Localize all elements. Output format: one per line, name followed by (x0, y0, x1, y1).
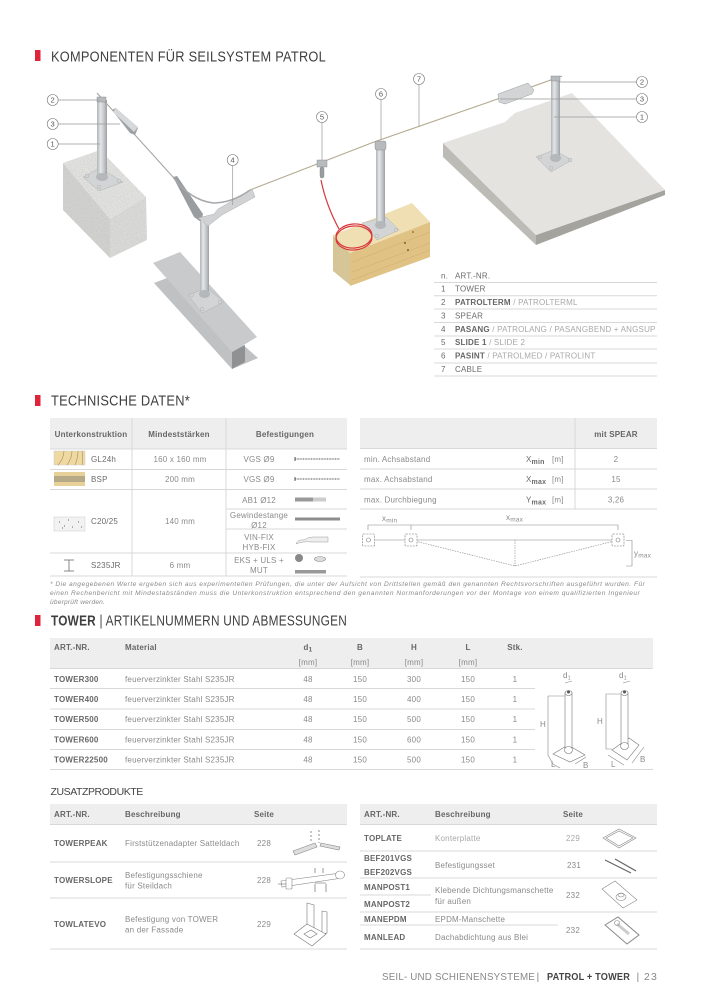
row TOWER400: 400 (407, 695, 421, 704)
callout numbers: 3 (640, 95, 644, 104)
table: accessories right: Seite (563, 810, 583, 819)
row TOWER500: 48 (303, 715, 313, 724)
row TOWERSLOPE: Befestigungsschiene (125, 871, 203, 880)
callout numbers: 1 (640, 113, 644, 122)
row TOWER300: 150 (461, 675, 475, 684)
legend table: 4 (441, 325, 446, 334)
diagram: spacing and deflection: y (634, 549, 638, 558)
table: substructures: EKS + ULS + (234, 556, 284, 565)
row TOWER300: 48 (303, 675, 313, 684)
footnote: überprüft werden. (50, 599, 105, 606)
row TOWER600: TOWER600 (54, 736, 99, 744)
legend table: 6 (441, 352, 446, 360)
row TOWERPEAK (54, 839, 271, 848)
heading: Technische Daten: TECHNISCHE DATEN* (51, 392, 190, 410)
icon: towerpeak (293, 830, 340, 855)
row TOWER500: 500 (407, 715, 421, 724)
icon: GL24h (54, 451, 85, 465)
table: accessories left (50, 804, 347, 949)
table: tower dimensions: [mm] (459, 658, 477, 667)
row MANPOST: Klebende Dichtungsmanschette (435, 886, 554, 895)
table: substructures: 200 mm (165, 475, 195, 484)
table: tower dimensions: 1 (309, 646, 313, 654)
table: spear data: max (532, 500, 546, 506)
row TOWERSLOPE: 228 (257, 876, 271, 885)
row TOWER500: feuerverzinkter Stahl S235JR (125, 715, 235, 724)
icon: screws (605, 859, 636, 873)
icon: towerslope (278, 868, 344, 892)
table: accessories right (360, 804, 657, 949)
table: spear data: 3,26 (608, 496, 625, 504)
table: tower dimensions: ART.-NR. (54, 643, 90, 652)
row TOWER600: 48 (303, 736, 313, 744)
table: accessories left: Beschreibung (125, 810, 181, 819)
table: tower dimensions: Stk. (507, 643, 523, 652)
table: substructures: GL24h (91, 455, 116, 464)
dimension drawing 2: H (597, 717, 603, 726)
dimension drawing 1: B (583, 761, 589, 770)
table: substructures: C20/25 (91, 517, 118, 526)
table: tower dimensions: [mm] (405, 658, 423, 667)
icon: BSP (54, 472, 85, 486)
table: accessories left: ART.-NR. (54, 810, 90, 819)
row TOWER400: TOWER400 (54, 695, 99, 704)
angle bracket (173, 176, 255, 226)
footer: 23 (644, 971, 657, 983)
table: tower dimensions (50, 638, 653, 770)
table: substructures: 140 mm (165, 517, 195, 526)
legend table: SPEAR (455, 312, 483, 320)
row MANEPDM and MANLEAD: 232 (566, 926, 580, 935)
icon: manpost (602, 881, 637, 908)
towers (96, 80, 561, 298)
table: spear data: min (532, 459, 545, 466)
row TOWER600: 600 (407, 736, 421, 744)
table: spear data: min. Achsabstand (364, 455, 430, 464)
sliders and heads (97, 76, 560, 178)
footer: PATROL + TOWER (547, 971, 630, 983)
row TOWLATEVO: an der Fassade (125, 926, 184, 934)
diagram: spacing and deflection (362, 513, 652, 566)
legend table: n. (441, 272, 448, 280)
heading: Zusatzprodukte: ZUSATZPRODUKTE (50, 786, 144, 798)
row BEF: 231 (567, 861, 581, 870)
legend table: PATROLTERM / PATROLTERML (455, 298, 578, 307)
row MANPOST: MANPOST1 (364, 883, 410, 892)
table: spear data: [m] (552, 475, 564, 484)
row TOWER22500: 1 (513, 756, 518, 764)
table: substructures: S235JR (91, 561, 121, 570)
table: spear data: mit SPEAR (594, 430, 638, 439)
icon: toplate (603, 829, 636, 848)
table: spear data: 15 (611, 475, 621, 484)
callout numbers: 3 (51, 120, 55, 129)
table: substructures: Mindeststärken (148, 430, 210, 439)
row TOWER22500: 500 (407, 756, 421, 764)
legend table (434, 272, 657, 376)
row TOWLATEVO: 229 (257, 920, 271, 929)
row TOWLATEVO: Befestigung von TOWER (125, 915, 218, 924)
legend table: SLIDE 1 / SLIDE 2 (455, 338, 525, 347)
dimension drawing 1: 1 (568, 676, 571, 682)
legend table: 2 (441, 298, 446, 307)
callout numbers: 2 (51, 96, 55, 105)
legend table: ART.-NR. (455, 272, 490, 280)
row TOWER600 (54, 736, 518, 744)
table: tower dimensions: H (411, 643, 417, 652)
row TOWER22500: TOWER22500 (54, 756, 108, 764)
timber beam (333, 203, 430, 286)
table: substructures: VIN-FIX (244, 533, 274, 542)
table: substructures: VGS Ø9 (244, 455, 275, 464)
concrete slab (443, 93, 665, 245)
footer: | (537, 971, 539, 983)
base plates (83, 150, 572, 313)
legend table: TOWER (455, 284, 486, 294)
table: spear data: max (532, 479, 546, 486)
table: substructures: MUT (250, 566, 268, 575)
footnote (50, 581, 646, 606)
table: spear data: max. Durchbiegung (364, 496, 437, 504)
table: tower dimensions: L (465, 643, 471, 652)
row MANEPDM and MANLEAD: Dachabdichtung aus Blei (435, 933, 528, 942)
row TOWER400: 1 (513, 695, 518, 704)
table: substructures: Gewindestange (230, 511, 288, 520)
table: spear data: [m] (552, 496, 564, 504)
table: substructures (50, 418, 347, 576)
dimension drawing 2 (597, 671, 646, 769)
row TOPLATE (364, 834, 580, 843)
legend table: 7 (441, 365, 446, 374)
callout numbers: 4 (231, 156, 235, 165)
dimension drawing 2: d (619, 671, 624, 680)
table: spear data: Y (526, 496, 532, 504)
icon: C20/25 (54, 517, 85, 531)
table: substructures: AB1 Ø12 (242, 496, 276, 505)
row TOWER22500: 150 (353, 756, 367, 764)
heading: Tower: TOWER | ARTIKELNUMMERN UND ABMESSUNGEN (51, 612, 347, 630)
footer (382, 971, 657, 983)
table: substructures: VGS Ø9 (244, 475, 275, 484)
table: tower dimensions: B (357, 643, 363, 652)
diagram: spacing and deflection: x (506, 513, 510, 522)
callout numbers: 7 (417, 75, 421, 84)
table: substructures: BSP (91, 475, 108, 484)
row TOWER600: 150 (353, 736, 367, 744)
diagram: spacing and deflection: x (382, 514, 386, 523)
row TOWER22500: feuerverzinkter Stahl S235JR (125, 756, 235, 764)
row TOWERSLOPE (54, 871, 271, 890)
table: spear data: X (526, 475, 532, 484)
legend table: CABLE (455, 365, 482, 374)
wire rope (97, 76, 562, 190)
table: substructures: 160 x 160 mm (153, 455, 207, 464)
row MANEPDM and MANLEAD: EPDM-Manschette (435, 915, 505, 924)
table: tower dimensions: [mm] (351, 658, 369, 667)
callout lines (58, 82, 636, 205)
row TOPLATE: TOPLATE (364, 834, 402, 843)
diagram: spacing and deflection: max (638, 552, 652, 560)
dimension drawing 1: L (551, 760, 556, 769)
row TOWER400: 150 (461, 695, 475, 704)
row TOWERPEAK: 228 (257, 839, 271, 848)
callout numbers: 2 (640, 78, 644, 87)
legend table: 1 (441, 284, 446, 294)
icon: manlead (605, 917, 639, 944)
legend table: 5 (441, 338, 446, 347)
footnote: * Die angegebenen Werte ergeben sich aus experimentellen Prüfungen, die unter der Aufsicht von Drittstellen gemäß den genannten Rechtsvorschriften ausgeführt wurden. Für (50, 581, 646, 588)
row TOWER400: 48 (303, 695, 313, 704)
row TOWERPEAK: TOWERPEAK (54, 839, 108, 848)
dimension drawing 2: 1 (624, 676, 627, 682)
row TOWERPEAK: Firststützenadapter Satteldach (125, 839, 240, 848)
steel I-beam (153, 252, 258, 369)
row TOWER400: 150 (353, 695, 367, 704)
row TOWER600: 150 (461, 736, 475, 744)
table: substructures: HYB-FIX (243, 543, 276, 552)
table: tower dimensions: Material (125, 643, 157, 652)
row MANPOST: 232 (566, 891, 580, 900)
row BEF: Befestigungsset (435, 861, 496, 870)
legend table: PASANG / PATROLANG / PASANGBEND + ANGSUP (455, 325, 656, 334)
diagram: spacing and deflection: min (386, 518, 397, 524)
callout numbers: 5 (320, 113, 324, 122)
callout numbers (47, 74, 647, 166)
heading: Komponenten: KOMPONENTEN FÜR SEILSYSTEM PATROL (51, 48, 326, 66)
footer: SEIL- UND SCHIENENSYSTEME (382, 971, 535, 983)
footer: | (637, 971, 639, 983)
row TOWER500 (54, 715, 518, 724)
callout numbers: 1 (51, 140, 55, 149)
row TOWER600: feuerverzinkter Stahl S235JR (125, 736, 235, 744)
row BEF (364, 854, 581, 877)
table: substructures: Unterkonstruktion (55, 430, 127, 439)
row TOWER300: 300 (407, 675, 421, 684)
table: tower dimensions: [mm] (299, 658, 317, 667)
table: spear data: X (526, 455, 532, 464)
dimension drawing 1 (540, 671, 589, 770)
icons: fasteners (295, 457, 340, 574)
row TOWERSLOPE: für Steildach (125, 882, 172, 890)
table: accessories left: Seite (254, 810, 274, 819)
row TOWER300 (54, 675, 518, 684)
row MANEPDM and MANLEAD (364, 915, 580, 942)
row TOWER22500: 48 (303, 756, 313, 764)
row TOPLATE: Konterplatte (435, 834, 481, 843)
row TOWER400: feuerverzinkter Stahl S235JR (125, 695, 235, 704)
dimension drawing 1: d (563, 671, 568, 680)
table: substructures: 6 mm (170, 561, 191, 570)
table: substructures: Ø12 (251, 521, 267, 530)
red rope coil (321, 180, 373, 251)
row TOWER300: 150 (353, 675, 367, 684)
legend table: 3 (441, 312, 446, 320)
diagram: spacing and deflection: max (510, 516, 524, 524)
row TOWER300: 1 (513, 675, 518, 684)
row TOWER300: TOWER300 (54, 675, 99, 684)
table: spear data: 2 (614, 455, 619, 464)
row TOWERSLOPE: TOWERSLOPE (54, 876, 113, 885)
product illustration: rope system (47, 74, 665, 369)
icon: towlatevo (294, 903, 327, 946)
row TOWER400 (54, 695, 518, 704)
row TOWER500: 150 (461, 715, 475, 724)
dimension drawing 2: B (640, 755, 646, 764)
row MANEPDM and MANLEAD: MANEPDM (364, 915, 407, 924)
row MANEPDM and MANLEAD: MANLEAD (364, 933, 405, 942)
callout numbers: 6 (379, 90, 383, 99)
dimension drawing 2: L (611, 760, 616, 769)
dimension drawing 1: H (540, 720, 546, 729)
row TOPLATE: 229 (566, 834, 580, 843)
icon: I-beam (64, 560, 74, 571)
row BEF: BEF201VGS (364, 854, 413, 863)
row TOWER300: feuerverzinkter Stahl S235JR (125, 675, 235, 684)
row TOWLATEVO (54, 915, 271, 934)
row TOWER500: 1 (513, 715, 518, 724)
row BEF: BEF202VGS (364, 868, 413, 877)
row TOWER500: TOWER500 (54, 715, 99, 724)
row MANPOST: MANPOST2 (364, 900, 410, 909)
row TOWER500: 150 (353, 715, 367, 724)
legend table: PASINT / PATROLMED / PATROLINT (455, 352, 595, 360)
table: accessories right: ART.-NR. (364, 810, 400, 819)
table: substructures: Befestigungen (256, 430, 314, 439)
row TOWLATEVO: TOWLATEVO (54, 920, 106, 929)
row TOWER22500 (54, 756, 518, 764)
row TOWER22500: 150 (461, 756, 475, 764)
table: spear data (360, 418, 657, 577)
row TOWER600: 1 (513, 736, 518, 744)
tensioners (112, 83, 534, 135)
footnote: einen Rechenbericht mit Mindestabständen muss die Unterkonstruktion entsprechend den genannten Normanforderungen vor der Montage von einem qualifizierten Ingenieur (50, 590, 641, 597)
row MANPOST (364, 883, 580, 909)
row MANPOST: für außen (435, 897, 471, 906)
table: spear data: max. Achsabstand (364, 475, 433, 484)
concrete block (63, 150, 147, 258)
table: tower dimensions: d (304, 643, 309, 652)
table: accessories right: Beschreibung (435, 810, 491, 819)
table: spear data: [m] (552, 455, 564, 464)
